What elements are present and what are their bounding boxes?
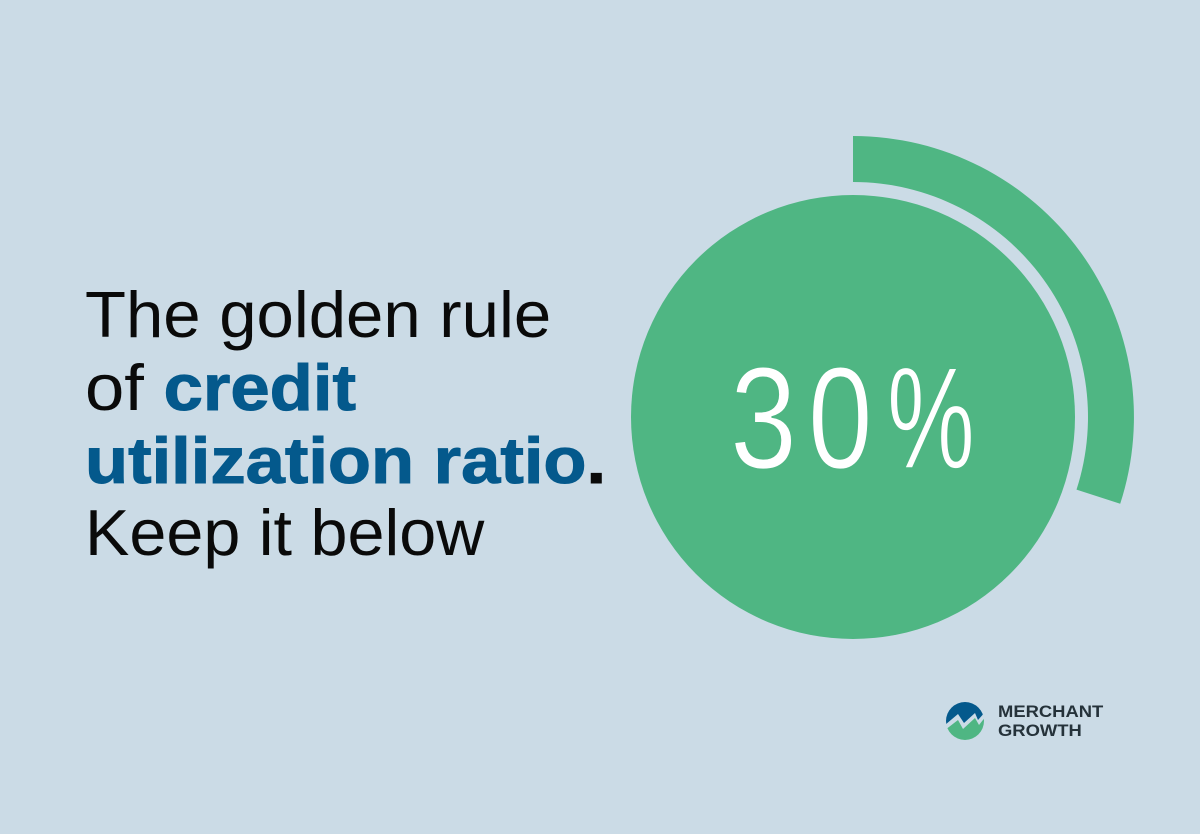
progress arc: 30 percent [853, 136, 1134, 504]
value: 30%: % [887, 337, 975, 499]
heading: The golden rule [85, 278, 551, 350]
heading: of credit [85, 350, 356, 424]
value: 30%: 0 [808, 337, 873, 499]
logo [946, 702, 1104, 740]
heading: utilization ratio. [85, 424, 606, 496]
logo wordmark [998, 703, 1104, 740]
value: 30% [730, 337, 975, 499]
logo icon [946, 702, 984, 740]
green circle [631, 195, 1075, 639]
heading [85, 278, 606, 569]
logo wordmark: MERCHANT [998, 703, 1103, 721]
logo wordmark: GROWTH [998, 722, 1082, 740]
heading: Keep it below [85, 496, 484, 569]
value: 30%: 3 [730, 337, 797, 499]
